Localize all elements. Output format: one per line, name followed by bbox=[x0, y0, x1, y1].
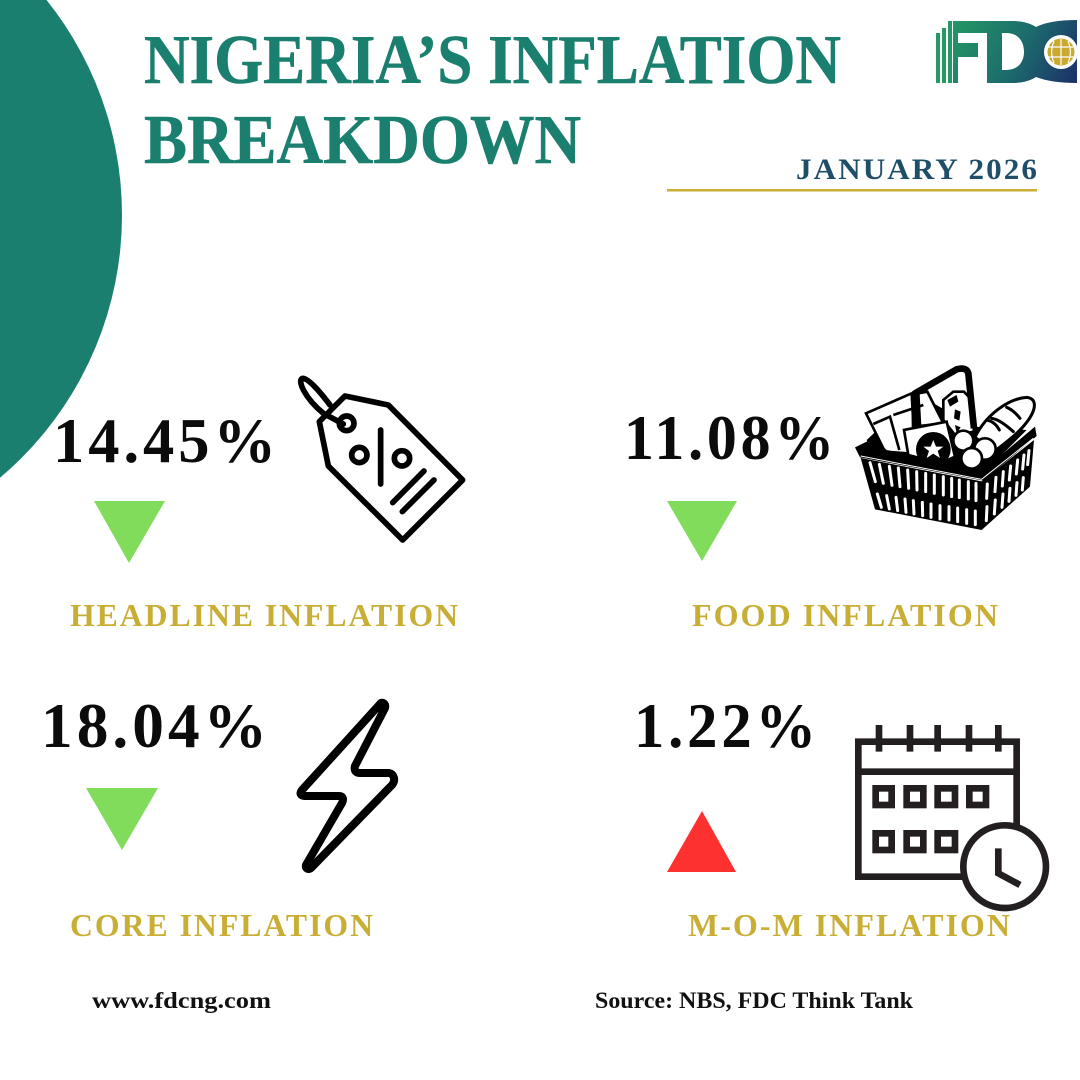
panel: month-on-month inflation bbox=[634, 691, 1046, 943]
panel: food inflation bbox=[624, 369, 1037, 633]
core value: 18.04% bbox=[41, 691, 271, 761]
date underline bbox=[667, 189, 1037, 192]
up arrow: m-o-m bbox=[667, 811, 736, 872]
icon: shopping basket bbox=[855, 369, 1037, 530]
title: NIGERIA’S INFLATION bbox=[144, 22, 841, 99]
food label: FOOD INFLATION bbox=[692, 597, 1000, 633]
headline value: 14.45% bbox=[53, 406, 280, 476]
m-o-m value: 1.22% bbox=[634, 691, 820, 761]
icon: price tag bbox=[301, 378, 463, 540]
panel: core inflation bbox=[41, 691, 394, 943]
icon: calendar with clock bbox=[858, 725, 1046, 908]
panel: headline inflation bbox=[53, 378, 463, 633]
m-o-m label: M-O-M INFLATION bbox=[688, 907, 1012, 943]
core label: CORE INFLATION bbox=[70, 907, 375, 943]
down arrow: headline bbox=[94, 501, 165, 563]
down arrow: core bbox=[86, 788, 158, 850]
title: BREAKDOWN bbox=[144, 102, 581, 179]
source note: Source: NBS, FDC Think Tank bbox=[595, 988, 913, 1013]
down arrow: food bbox=[667, 501, 737, 561]
icon: lightning bolt bbox=[301, 703, 394, 869]
date label: JANUARY 2026 bbox=[796, 153, 1039, 186]
decorative teal circle bbox=[0, 0, 122, 559]
logo: FDC bbox=[936, 20, 1078, 83]
website: www.fdcng.com bbox=[92, 988, 271, 1013]
headline label: HEADLINE INFLATION bbox=[70, 597, 460, 633]
food value: 11.08% bbox=[624, 403, 838, 473]
title bbox=[144, 22, 841, 179]
